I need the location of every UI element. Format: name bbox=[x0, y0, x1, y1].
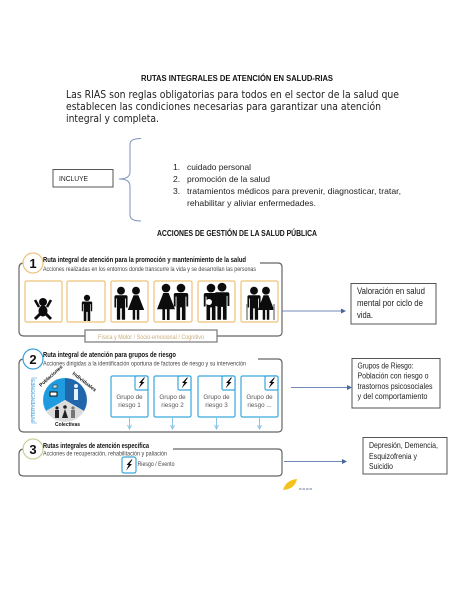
pie chart: intervenciones: Colectivas bbox=[55, 422, 80, 428]
panel 2 subtitle: Acciones dirigidas a la identificación oportuna de factores de riesgo y su intervención bbox=[43, 362, 246, 368]
icon: adult couple bbox=[157, 284, 188, 320]
card: grupo n: Grupo de bbox=[246, 394, 273, 401]
panel 3 subtitle: Acciones de recuperación, rehabilitación y paliación bbox=[43, 452, 167, 458]
curly bracket bbox=[119, 138, 141, 221]
card: grupo n: riesgo ... bbox=[247, 402, 272, 409]
pie chart: intervenciones: Individuales bbox=[71, 371, 97, 394]
intervenciones label: INTERVENCIONES bbox=[31, 379, 37, 422]
tag: físico motor bbox=[85, 330, 217, 342]
box: depresión: Esquizofrenia y bbox=[369, 451, 418, 461]
badge 1 bbox=[23, 253, 43, 273]
panel 1 subtitle: Acciones realizadas en los entornos donde transcurre la vida y se desarrollan las personas bbox=[43, 267, 256, 273]
numbered list: promoción de la salud bbox=[187, 174, 270, 184]
life stage boxes bbox=[25, 281, 278, 322]
card: grupo 2: riesgo 2 bbox=[161, 402, 184, 409]
card: grupo 3: Grupo de bbox=[203, 394, 230, 401]
arrow to depresión bbox=[284, 460, 346, 462]
intro paragraph: establecen las condiciones necesarias para garantizar una atención bbox=[66, 100, 381, 113]
box: depresión bbox=[363, 438, 447, 474]
intro paragraph: integral y completa. bbox=[66, 112, 159, 125]
box: grupos de riesgo: trastornos psicosociales bbox=[358, 382, 432, 391]
icon: baby bbox=[35, 298, 51, 319]
pie chart: intervenciones bbox=[38, 364, 97, 428]
down arrows bbox=[128, 418, 262, 429]
incluye box bbox=[53, 170, 113, 187]
card: grupo 1 bbox=[111, 376, 148, 417]
box: grupos de riesgo bbox=[352, 358, 440, 408]
numbered list: tratamientos médicos para prevenir, diagnosticar, tratar, bbox=[187, 186, 401, 196]
pie chart: intervenciones: Poblaciones bbox=[38, 364, 64, 388]
box: valoración: mental por ciclo de bbox=[357, 298, 423, 308]
box: valoración: Valoración en salud bbox=[357, 286, 425, 296]
numbered list: 2. bbox=[173, 174, 180, 184]
numbered list: rehabilitar y aliviar enfermedades. bbox=[187, 198, 316, 208]
numbered list: 3. bbox=[173, 186, 180, 196]
badge 3: 3 bbox=[29, 442, 37, 457]
card: grupo 1: riesgo 1 bbox=[118, 402, 141, 409]
box: grupos de riesgo: Población con riesgo o bbox=[358, 372, 429, 380]
card: grupo n bbox=[241, 376, 278, 417]
icon: pregnant couple bbox=[204, 283, 229, 320]
arrow to valoración bbox=[282, 310, 345, 312]
intro paragraph: Las RIAS son reglas obligatorias para todos en el sector de la salud que bbox=[66, 88, 399, 101]
panel 1 title: Ruta integral de atención para la promoción y mantenimiento de la salud bbox=[43, 257, 246, 264]
panel 2: grupos de riesgo bbox=[19, 349, 282, 432]
badge 2: 2 bbox=[29, 352, 37, 367]
panel 3: atención específica bbox=[19, 439, 282, 476]
numbered list: cuidado personal bbox=[187, 162, 251, 172]
box: valoración: vida. bbox=[357, 310, 373, 320]
badge 1: 1 bbox=[29, 256, 37, 271]
box: depresión: Suicidio bbox=[369, 461, 393, 471]
section heading: ACCIONES DE GESTIÓN DE LA SALUD PÚBLICA bbox=[157, 227, 317, 238]
icon: elderly couple bbox=[247, 287, 274, 320]
panel 1: promoción y mantenimiento bbox=[19, 253, 282, 342]
risk group cards bbox=[111, 376, 278, 417]
card: grupo 2: Grupo de bbox=[159, 394, 186, 401]
incluye box: INCLUYE bbox=[59, 174, 88, 183]
icon: adolescents bbox=[114, 287, 144, 320]
title: RUTAS INTEGRALES DE ATENCIÓN EN SALUD-RIAS bbox=[141, 72, 333, 83]
arrow to grupos de riesgo bbox=[291, 386, 351, 388]
card: grupo 2 bbox=[154, 376, 191, 417]
box: grupos de riesgo: Grupos de Riesgo: bbox=[358, 362, 414, 370]
icon: riesgo bbox=[122, 457, 136, 473]
card: grupo 3: riesgo 3 bbox=[205, 402, 228, 409]
panel 3 title: Rutas integrales de atención específica bbox=[43, 443, 149, 450]
icon: child bbox=[82, 295, 92, 321]
box: depresión: Depresión, Demencia, bbox=[369, 440, 438, 450]
box: grupos de riesgo: y del comportamiento bbox=[358, 392, 428, 401]
badge 2 bbox=[23, 349, 43, 369]
card: grupo 1: Grupo de bbox=[116, 394, 143, 401]
box: valoración bbox=[351, 284, 436, 324]
icon: yellow leaf bbox=[283, 479, 312, 490]
card: grupo 3 bbox=[198, 376, 235, 417]
numbered list bbox=[173, 162, 401, 208]
riesgo evento label: Riesgo / Evento bbox=[138, 461, 175, 468]
tag: físico motor: Física y Motor / Socio-emocional / Cognitivo bbox=[98, 334, 204, 341]
intro paragraph bbox=[66, 88, 399, 125]
numbered list: 1. bbox=[173, 162, 180, 172]
panel 2 title: Ruta integral de atención para grupos de riesgo bbox=[43, 352, 176, 359]
badge 3 bbox=[23, 439, 43, 459]
